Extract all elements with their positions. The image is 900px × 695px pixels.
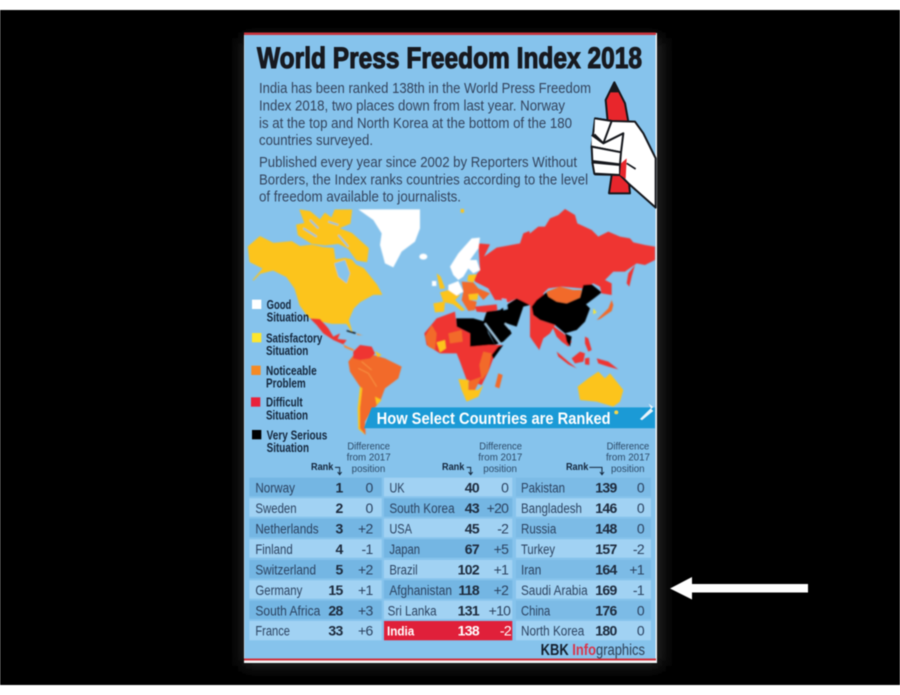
text block: intro: Index 2018, two places down from last year. Norway: [259, 98, 565, 114]
table: left column: France: [255, 624, 290, 639]
table: column headers: position: [483, 464, 517, 475]
table: right column: 139: [595, 480, 618, 496]
table: left column: 2: [336, 500, 344, 516]
table: India highlighted row: [384, 621, 512, 640]
table: middle column: 118: [458, 582, 480, 598]
map: Turkey: [475, 304, 497, 312]
table: India highlighted row: India: [387, 624, 415, 639]
table: right column: Russia: [521, 522, 557, 537]
text block: about the index: Borders, the Index ranks countries according to the level: [259, 172, 588, 188]
credit: KBK Infographics: KBK Infographics: [541, 642, 645, 659]
text block: about the index: Published every year since 2002 by Reporters Without: [259, 154, 578, 171]
table: right column: 0: [637, 521, 645, 537]
table: left column: 1: [336, 480, 344, 496]
table: column headers: position: [611, 464, 645, 475]
map: Hudson Bay: [334, 260, 350, 283]
map: Scandinavia: [450, 238, 480, 280]
legend: good: Situation: [267, 311, 309, 325]
table: left column: 15: [328, 582, 344, 598]
arrow pointing to Saudi Arabia row: [670, 577, 808, 600]
legend: very serious: Very Serious: [267, 428, 327, 442]
map: Caspian Sea: [502, 298, 508, 310]
text block: intro: is at the top and North Korea at the bottom of the 180: [259, 115, 572, 132]
table: left column: [255, 480, 374, 639]
legend: difficult: [251, 396, 308, 422]
table: left column: +6: [358, 623, 374, 639]
text block: intro: [259, 80, 591, 149]
map: Russia east: [530, 209, 655, 300]
map: North America and Arctic islands: [248, 210, 382, 331]
legend: noticeable: Noticeable: [266, 364, 317, 378]
table: column headers: from 2017: [347, 453, 391, 464]
legend: satisfactory: [252, 331, 322, 358]
table: column headers: Difference: [479, 441, 522, 452]
legend: good: Good: [267, 298, 291, 312]
table: right column: 0: [637, 623, 645, 639]
map: Russia west: [473, 228, 543, 305]
table: right column: Bangladesh: [521, 501, 582, 516]
map: Western and Central Europe: [432, 273, 490, 312]
map: Japan and Korea: [593, 300, 613, 320]
table: right column: -1: [633, 582, 645, 598]
table: right column: 146: [595, 500, 618, 516]
map: China: [532, 284, 602, 347]
table: [249, 441, 651, 659]
legend: very serious: Situation: [267, 441, 309, 455]
legend: [251, 298, 327, 455]
table: left column: +2: [358, 561, 374, 577]
table: middle column: Brazil: [389, 562, 418, 577]
map: South Asia: [530, 300, 572, 350]
table: middle column: +1: [494, 561, 509, 577]
map: Middle East and North Africa: [456, 298, 530, 359]
table: middle column: Sri Lanka: [388, 603, 437, 618]
table: column headers: Rank: [442, 462, 465, 473]
table: right column: 169: [595, 582, 618, 598]
table: middle column: 102: [458, 561, 480, 577]
map: South America: [348, 345, 402, 435]
table: right column: China: [521, 603, 551, 618]
table: middle column: +5: [494, 541, 509, 557]
table: right column: 0: [637, 480, 645, 496]
table: right column: 0: [637, 602, 645, 618]
table: middle column: 131: [458, 602, 480, 618]
table: left column: +2: [358, 521, 374, 537]
table: right column: Pakistan: [521, 481, 565, 496]
table: middle column: [388, 480, 511, 618]
table: right column: -2: [633, 541, 645, 557]
table: middle column: UK: [389, 481, 405, 496]
table: middle column: -2: [497, 521, 509, 537]
legend: noticeable: [251, 364, 317, 390]
map: Red Sea and Caspian: [485, 323, 510, 343]
table: left column: 4: [336, 541, 344, 557]
table: middle column: 43: [465, 500, 480, 516]
legend: satisfactory: Satisfactory: [266, 331, 322, 345]
map: Mexico and Central America: [310, 318, 363, 351]
text block: about the index: of freedom available to journalists.: [259, 188, 461, 206]
table: column headers: Rank: [311, 462, 334, 473]
icon: fist holding red pencil: [592, 82, 656, 208]
table: middle column: South Korea: [389, 501, 455, 516]
title: World Press Freedom Index 2018: [257, 42, 642, 75]
table: India highlighted row: -2: [500, 623, 512, 639]
map: Greenland: [358, 209, 420, 267]
table: left column: Sweden: [255, 501, 297, 516]
table: right column: 164: [595, 561, 618, 577]
table: middle column: 40: [465, 480, 480, 496]
table: column headers: from 2017: [478, 453, 523, 464]
table: left column: Germany: [255, 583, 302, 598]
banner: How Select Countries are Ranked: How Select Countries are Ranked: [377, 409, 611, 428]
legend: good: [252, 298, 309, 325]
table: right column: Saudi Arabia: [521, 583, 588, 598]
table: left column: +1: [358, 582, 374, 598]
text block: intro: India has been ranked 138th in the World Press Freedom: [259, 80, 591, 97]
legend: satisfactory: Situation: [266, 344, 308, 358]
table: left column: -1: [362, 541, 374, 557]
table: middle column: 45: [465, 521, 480, 537]
table: left column: 33: [328, 623, 344, 639]
table: column headers: from 2017: [606, 453, 650, 464]
legend: very serious: [252, 428, 327, 455]
table: right column: +1: [629, 561, 645, 577]
table: India highlighted row: 138: [458, 623, 480, 639]
map: Iceland and Svalbard: [419, 209, 464, 260]
table: middle column: Afghanistan: [389, 583, 452, 598]
table: rows background: [249, 478, 651, 640]
table: left column: Switzerland: [255, 562, 316, 577]
table: column headers: Rank: [566, 462, 589, 473]
table: middle column: Japan: [389, 542, 420, 557]
table: left column: South Africa: [255, 603, 321, 618]
table: right column: North Korea: [521, 624, 585, 639]
table: right column: 148: [595, 521, 618, 537]
world map: [248, 209, 655, 435]
table: left column: 28: [328, 602, 344, 618]
text block: intro: countries surveyed.: [259, 132, 373, 149]
table: right column: 180: [595, 623, 618, 639]
table: right column: Iran: [521, 562, 541, 577]
table: right column: 176: [595, 602, 618, 618]
table: middle column: +10: [489, 602, 511, 618]
map: Southeast Asia islands: [557, 337, 618, 369]
table: middle column: 67: [465, 541, 480, 557]
map: Australia: [578, 372, 623, 407]
table: middle column: USA: [389, 522, 413, 537]
text block: about the index: [259, 154, 588, 206]
table: column headers: Difference: [347, 441, 390, 452]
table: right column: 0: [637, 500, 645, 516]
table: column headers: [311, 441, 650, 475]
legend: difficult: Situation: [266, 408, 308, 422]
table: right column: [521, 480, 645, 639]
table: left column: 0: [366, 500, 374, 516]
table: left column: +3: [358, 602, 374, 618]
table: left column: Netherlands: [255, 522, 319, 537]
table: middle column: 0: [501, 480, 509, 496]
table: left column: Finland: [255, 542, 293, 557]
table: column headers: position: [352, 464, 385, 475]
map: Mongolia: [547, 287, 582, 303]
map: Sakhalin: [627, 265, 635, 287]
table: left column: Norway: [255, 481, 295, 496]
table: left column: 5: [336, 561, 344, 577]
table: column headers: Difference: [607, 441, 650, 452]
table: right column: 157: [595, 541, 618, 557]
table: middle column: +20: [487, 500, 509, 516]
map: Africa: [424, 312, 503, 402]
map: Arctic channels: [303, 220, 348, 247]
table: left column: 0: [366, 480, 374, 496]
table: right column: Turkey: [521, 542, 555, 557]
panel: infographic card: [244, 32, 657, 663]
table: middle column: +2: [494, 582, 509, 598]
legend: noticeable: Problem: [266, 376, 306, 390]
table: left column: 3: [336, 521, 344, 537]
legend: difficult: Difficult: [266, 396, 303, 410]
